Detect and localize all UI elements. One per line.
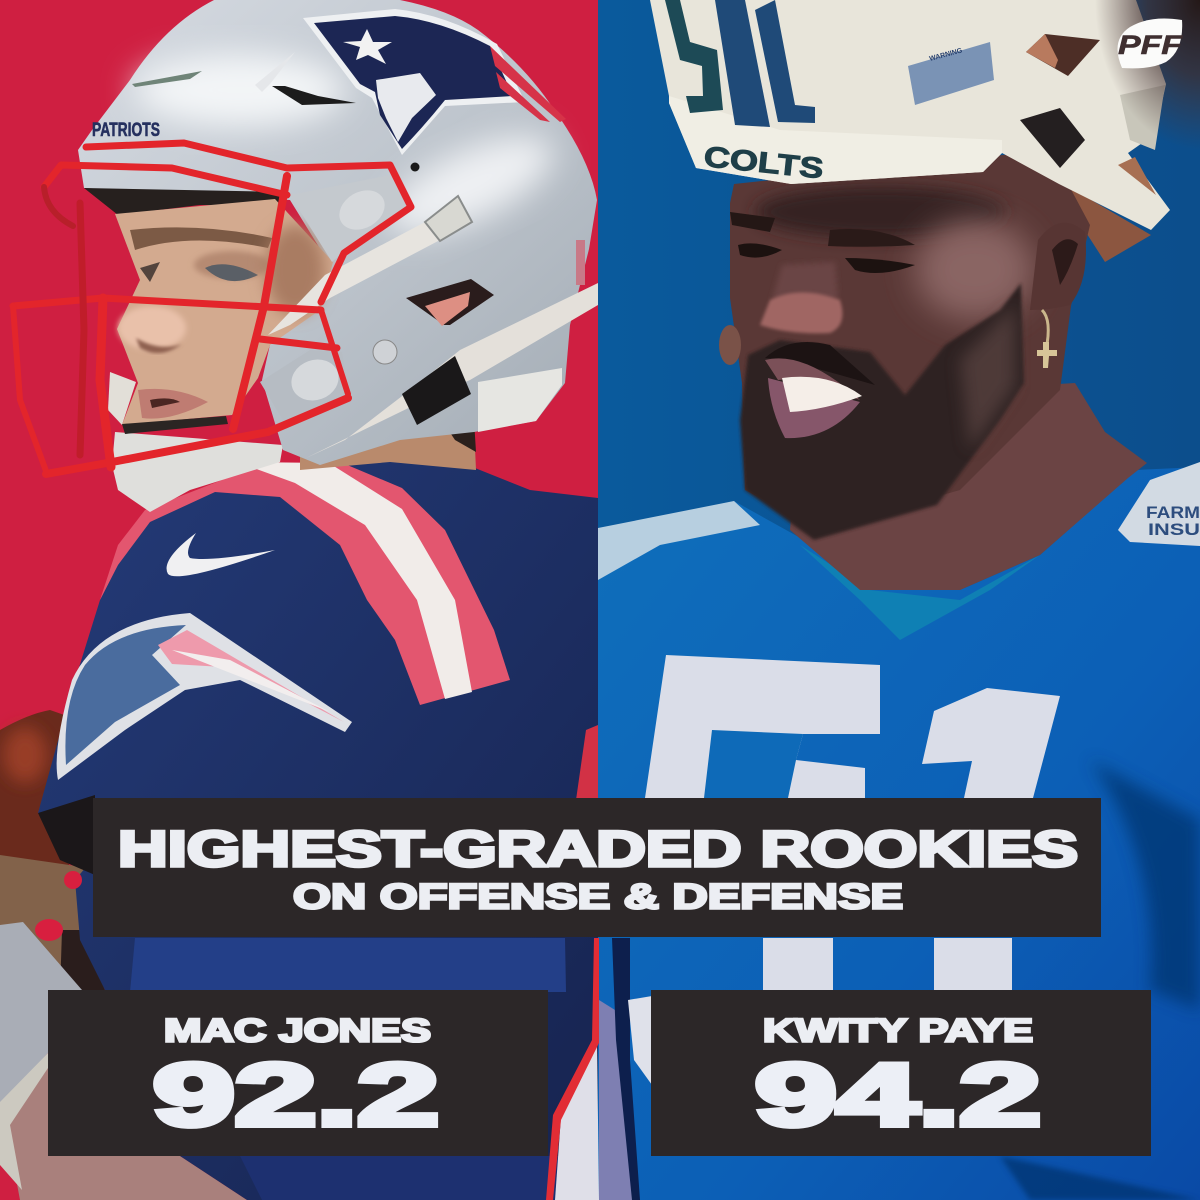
beard [740, 283, 1024, 540]
red facemask [13, 143, 411, 474]
vent slot upper [272, 86, 356, 105]
beard edge highlight [960, 305, 1015, 450]
helmet shell [78, 0, 597, 465]
mustache [765, 342, 875, 385]
swoosh logo [167, 533, 275, 576]
digit 1 right stripe [755, 0, 815, 123]
nose [760, 292, 842, 333]
shadow between hand and jersey [60, 930, 105, 992]
mouth opening [150, 398, 180, 408]
white stripe [237, 462, 472, 699]
sleeve patriots logo [57, 613, 352, 780]
red gap dots [35, 871, 82, 941]
jersey body [38, 459, 598, 1200]
eye left [738, 243, 782, 258]
digit 5 [665, 0, 723, 113]
helmet top number [665, 0, 815, 127]
subheading: ON OFFENSE & DEFENSE [293, 878, 903, 916]
mouth opening [768, 378, 860, 438]
teeth [782, 377, 862, 412]
center vertical [233, 176, 287, 429]
sleeve edge red piping [576, 725, 598, 800]
sleeve underside shadow [38, 795, 95, 875]
logo white outline [57, 613, 352, 780]
vent slot top highlight [132, 71, 202, 87]
player name: KWITY PAYE [763, 1012, 1033, 1048]
helmet name strip: PATRIOTS [92, 120, 160, 141]
patch text lower: INSU [1148, 520, 1200, 539]
cheek pad [108, 372, 136, 425]
lower vent copper [1118, 157, 1156, 195]
lower jersey light band [130, 938, 566, 992]
logo star [343, 29, 392, 64]
helmet highlight [135, 54, 345, 126]
centre seam: pants and piping [546, 938, 652, 1200]
strap buckle [425, 196, 472, 241]
neck [790, 383, 1147, 590]
helmet brim line [669, 96, 1002, 184]
helmet dot [410, 162, 420, 172]
top bar [86, 143, 411, 302]
colts brim text: COLTS [702, 141, 825, 186]
vent copper [1026, 34, 1058, 68]
purple-grey pant panel [599, 1000, 637, 1200]
lower fold shadow [1000, 1156, 1200, 1200]
lower snap [286, 353, 344, 407]
pink stripe band [100, 459, 510, 705]
earring cross [1037, 342, 1057, 368]
lower digit 1 part [934, 938, 1012, 990]
warning sticker [908, 42, 994, 105]
shoulder patch [1118, 462, 1200, 546]
helmet rear pad [478, 368, 562, 432]
upper dot [64, 871, 82, 889]
eye [205, 264, 258, 281]
earring hoop [1042, 310, 1048, 350]
left eye [140, 262, 160, 282]
left loop [44, 187, 73, 226]
jersey [598, 462, 1200, 1200]
strap clip [1020, 108, 1085, 168]
helmet screw [373, 340, 397, 364]
logo outline [303, 9, 525, 155]
lower digit 5 part [763, 938, 833, 990]
chin guard [112, 432, 283, 512]
PFF logo [1118, 19, 1184, 68]
neck [300, 434, 476, 470]
jersey body [598, 467, 1200, 1200]
football highlight [3, 727, 47, 783]
eye right [845, 258, 915, 273]
jersey [38, 459, 598, 1200]
upper helmet snap panel [290, 175, 410, 262]
forehead shading [755, 186, 1005, 238]
patch text: FARM [1146, 503, 1200, 522]
eye brow left [730, 212, 775, 232]
shoulder stripes [100, 459, 510, 705]
patriots helmet logo [303, 9, 566, 155]
headline box [93, 798, 1101, 937]
nose [118, 306, 186, 350]
wrist wrap [0, 1053, 48, 1190]
logo red stripes [490, 46, 566, 122]
left panel: Mac Jones [0, 0, 598, 1200]
logo white divider [172, 650, 330, 712]
hand [0, 855, 84, 966]
logo pink stripes [158, 630, 344, 722]
top right dark corner [1095, 0, 1200, 150]
card background [651, 990, 1151, 1156]
player name: MAC JONES [164, 1012, 431, 1048]
eye socket shade [194, 251, 270, 279]
head and face [719, 150, 1090, 540]
helmet [78, 0, 597, 465]
grade: 92.2 [153, 1045, 439, 1144]
left frame [13, 306, 46, 471]
right diagonal [321, 310, 348, 394]
logo face [376, 73, 436, 142]
grade: 94.2 [755, 1045, 1041, 1144]
red piping [546, 938, 599, 1200]
inner vertical [80, 203, 84, 455]
face [84, 188, 333, 434]
sticker body [908, 42, 994, 105]
nose shadow [136, 338, 182, 353]
eye brow right [828, 229, 915, 247]
logo text: PFF [1118, 30, 1184, 60]
second bar [44, 165, 287, 195]
side hardware [1120, 85, 1165, 150]
stat card: Kwity Paye [651, 990, 1151, 1156]
cheek highlight [915, 220, 1035, 320]
mid bar [13, 298, 321, 310]
collar [800, 545, 1040, 640]
football [0, 710, 70, 865]
helmet ear opening [406, 279, 494, 325]
wrist tape [0, 922, 82, 1110]
logo red stripe lower [496, 72, 550, 122]
logo navy [314, 16, 513, 149]
lower jersey band [240, 1156, 565, 1200]
vent opening upper [1026, 34, 1100, 76]
earring [1037, 310, 1057, 368]
sticker word: WARNING [929, 47, 964, 63]
digit 1 [922, 688, 1060, 798]
cheek shade [265, 225, 325, 315]
ear [1030, 223, 1086, 310]
chin strap shadow [122, 416, 228, 434]
front vertical [100, 298, 111, 467]
colts helmet [650, 0, 1170, 230]
ear skin [425, 292, 470, 326]
bottom bar [46, 398, 348, 474]
digit 5 inner cut [704, 730, 803, 798]
hair [1040, 170, 1151, 262]
black strap clip [402, 356, 471, 425]
headline: HIGHEST-GRADED ROOKIES [118, 821, 1078, 877]
helmet shell [650, 0, 1170, 230]
skin [730, 150, 1090, 530]
upper lip [765, 358, 860, 400]
pale pant panel [555, 1040, 599, 1200]
chin strap lower [306, 283, 598, 458]
digit 1 left stripe [715, 0, 770, 127]
logo blue head [65, 625, 186, 765]
card background [48, 990, 548, 1156]
hair/brow shade [130, 227, 272, 250]
patch shape [1118, 462, 1200, 546]
neck shadow [451, 432, 476, 452]
right fold shadow [1090, 760, 1200, 1010]
white jersey hem [628, 996, 652, 1085]
red background [0, 0, 598, 1200]
flag sticker [576, 240, 585, 285]
helmet lower highlight [383, 122, 564, 248]
side whisker [719, 325, 741, 365]
jaw pad panel [260, 350, 350, 425]
mouth [138, 389, 208, 419]
right panel: Kwity Paye [598, 0, 1200, 1200]
blue background [598, 0, 1200, 1200]
upper snap [332, 182, 392, 238]
chin strap upper [268, 222, 440, 335]
forearm [5, 1060, 247, 1200]
lower cross bar [260, 339, 337, 348]
headline box background [93, 798, 1101, 937]
digit 5 top [645, 655, 880, 798]
skin [115, 199, 333, 425]
jersey number [645, 655, 1060, 990]
nose bridge [772, 262, 838, 300]
shoulder highlight [598, 501, 760, 580]
logo football shape [1118, 19, 1182, 68]
dark seam strip [612, 938, 640, 1200]
vent slot outline [255, 52, 295, 92]
ear shadow [1052, 239, 1078, 285]
stat card: Mac Jones [48, 990, 548, 1156]
visor shadow [84, 188, 287, 215]
lower dot [35, 919, 63, 941]
